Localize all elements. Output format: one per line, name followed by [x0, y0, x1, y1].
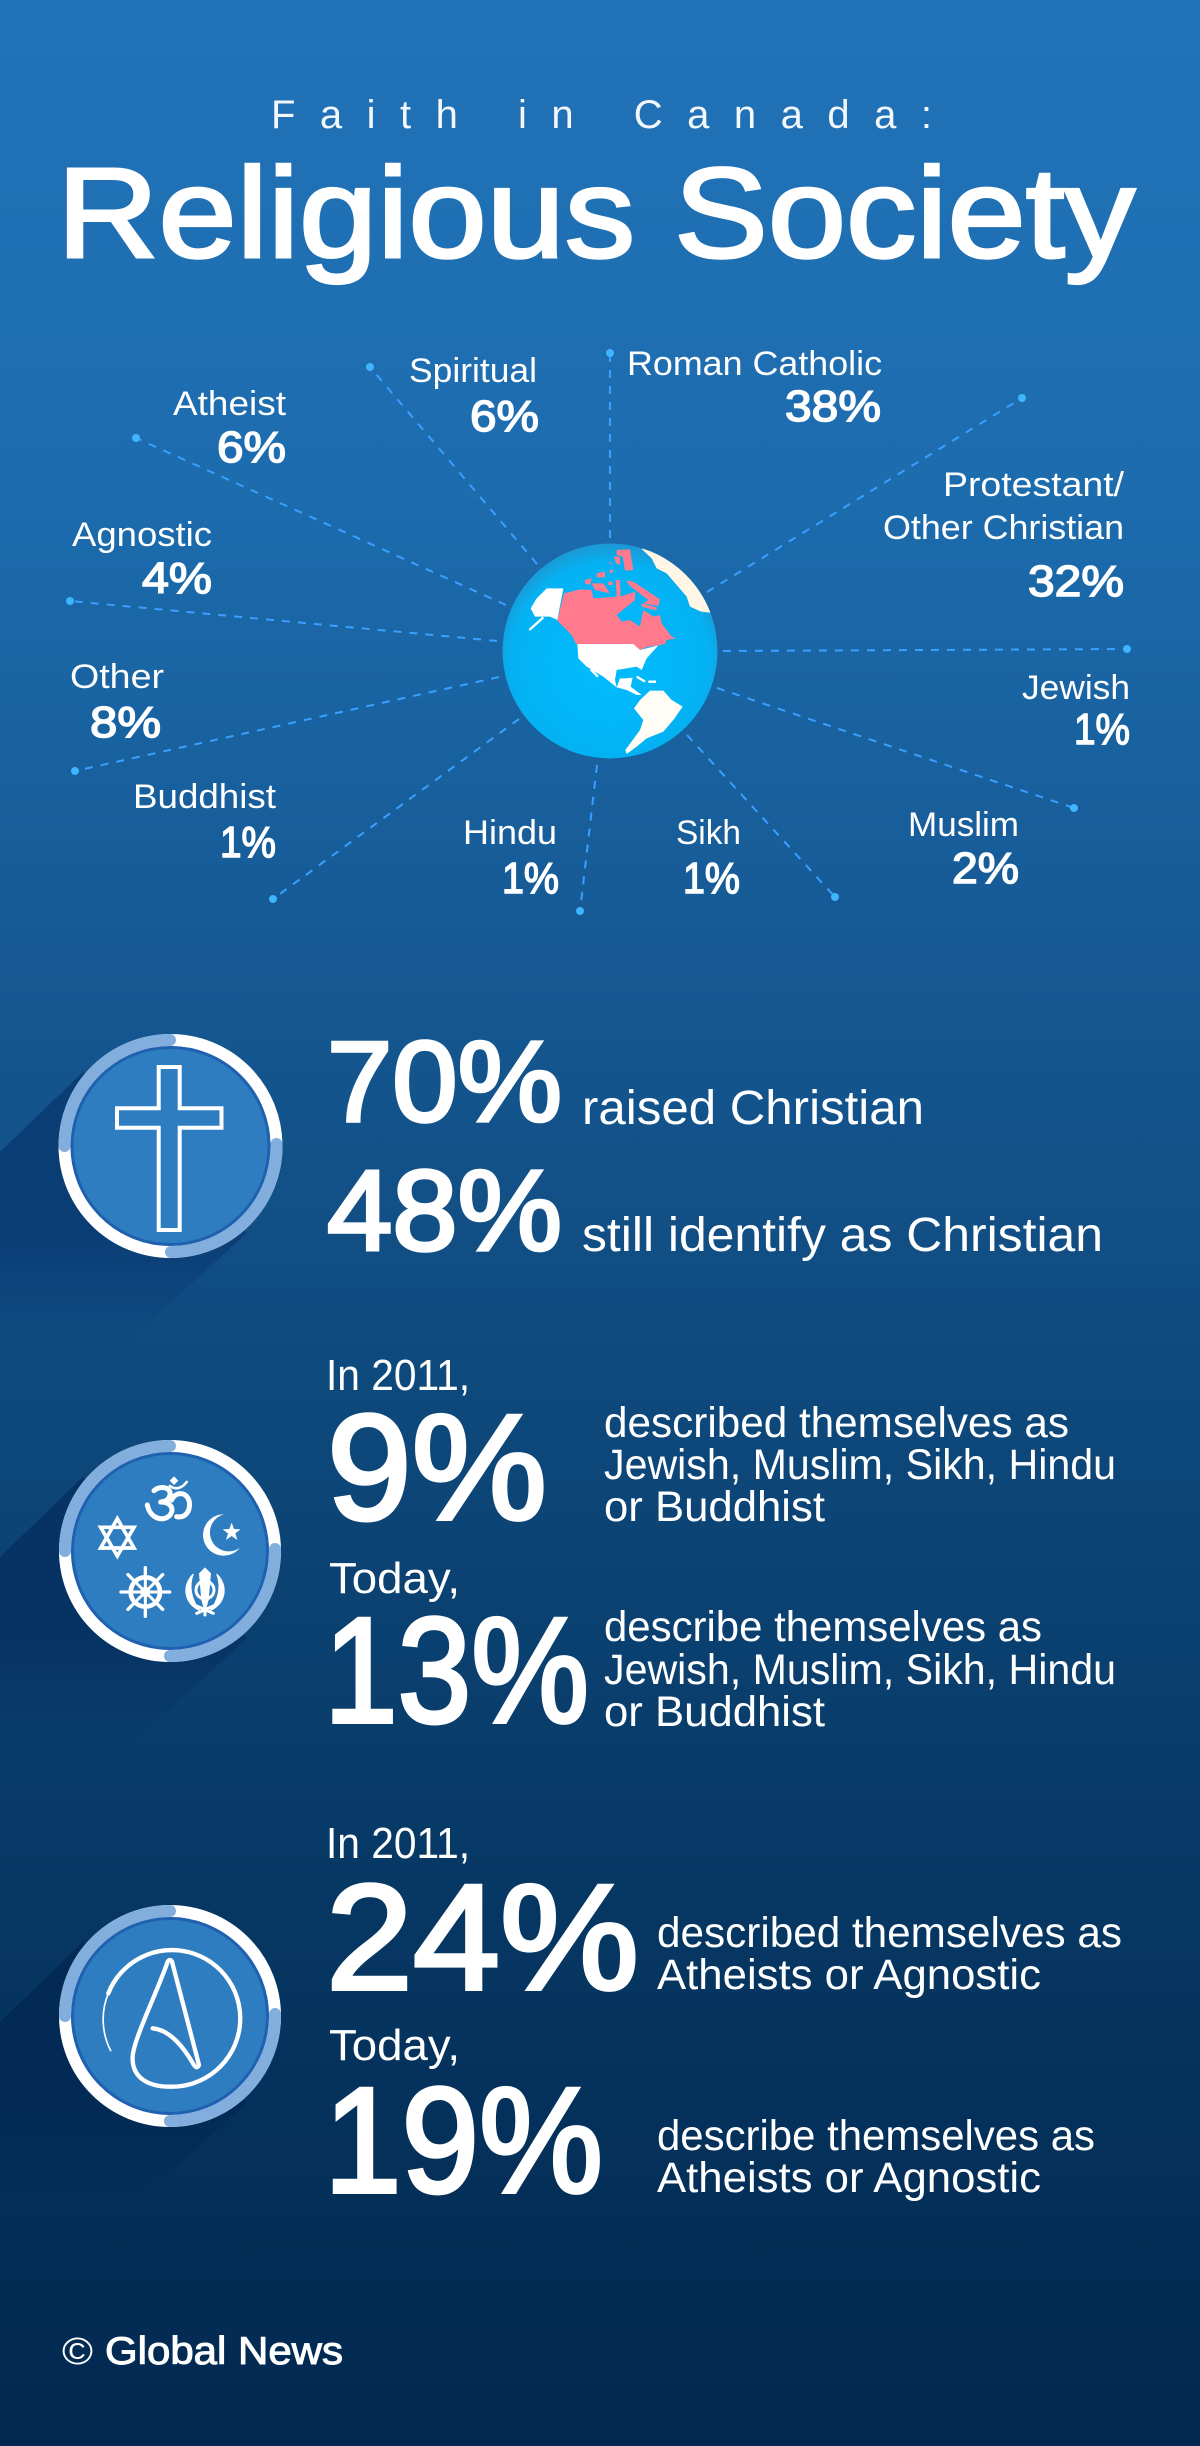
credit: Global News: ©	[62, 2331, 93, 2373]
icon: cross badge	[64, 1040, 277, 1252]
text: Today: Today,	[329, 2021, 460, 2070]
text: today description: describe themselves as	[657, 2112, 1095, 2160]
label: Roman Catholic 38%	[627, 345, 882, 431]
label: Roman Catholic 38%: Roman Catholic	[627, 345, 882, 383]
spoke: Jewish	[723, 645, 1131, 653]
text: today description: Atheists or Agnostic	[657, 2154, 1041, 2202]
label: Spiritual 6%: Spiritual	[409, 352, 537, 390]
label: Protestant/Other Christian 32%: Other Christian	[883, 509, 1124, 547]
label: Muslim 2%	[908, 806, 1019, 893]
text: today description	[604, 1603, 1116, 1736]
label: Agnostic 4%	[72, 516, 212, 603]
label: Atheist 6%: 6%	[217, 423, 286, 472]
religion breakdown radial chart	[66, 345, 1131, 915]
label: Atheist 6%: Atheist	[173, 385, 287, 423]
label: Protestant/Other Christian 32%: Protestant/	[943, 466, 1125, 504]
stat: 48% still identify as Christian: still identify as Christian	[582, 1209, 1103, 1262]
text: 2011 description: or Buddhist	[604, 1483, 825, 1531]
label: Sikh 1%	[676, 814, 741, 903]
text: Today: Today,	[329, 1554, 460, 1603]
label: Muslim 2%: Muslim	[908, 806, 1019, 844]
icon: atheism badge	[65, 1911, 275, 2121]
text: today description: or Buddhist	[604, 1688, 825, 1736]
label: Buddhist 1%	[133, 778, 277, 867]
stat: 19%: 19%	[324, 2056, 603, 2224]
stat: 13%: 13%	[324, 1586, 589, 1754]
label: Muslim 2%: 2%	[952, 844, 1019, 893]
text: In 2011: In 2011,	[326, 1351, 470, 1400]
panel: atheist and agnostic statistics	[0, 1819, 1122, 2224]
label: Agnostic 4%: Agnostic	[72, 516, 212, 554]
label: Protestant/Other Christian 32%: 32%	[1028, 557, 1124, 606]
icon: faith symbols badge	[65, 1446, 275, 1656]
label: Protestant/Other Christian 32%	[883, 466, 1125, 606]
text: 2011 description: described themselves as	[604, 1399, 1069, 1447]
label: Spiritual 6%: 6%	[470, 392, 539, 441]
spoke: Agnostic	[66, 597, 497, 641]
stat: 24%: 24%	[326, 1853, 639, 2021]
label: Other 8%: Other	[70, 658, 164, 696]
text: 2011 description	[604, 1399, 1116, 1531]
label: Roman Catholic 38%: 38%	[785, 382, 881, 431]
stat: 48% still identify as Christian: 48%	[327, 1148, 562, 1275]
stat: 48% still identify as Christian	[327, 1148, 1103, 1275]
stat: 70% raised Christian: raised Christian	[582, 1082, 924, 1135]
spoke: Atheist	[132, 434, 506, 605]
text: today description	[657, 2112, 1095, 2202]
stat: 70% raised Christian: 70%	[327, 1019, 562, 1146]
label: Other 8%: 8%	[90, 698, 161, 747]
title	[57, 93, 1135, 285]
panel: non-Christian faith statistics	[0, 1351, 1116, 1754]
spoke: Spiritual	[366, 363, 537, 564]
long shadow: atheism badge	[0, 1942, 247, 2210]
label: Sikh 1%: 1%	[683, 854, 740, 903]
label: Other 8%	[70, 658, 164, 747]
text: today description: describe themselves as	[604, 1603, 1042, 1651]
spoke: Sikh	[687, 735, 839, 901]
text: today description: Jewish, Muslim, Sikh, Hindu	[604, 1646, 1116, 1694]
spoke: Muslim	[717, 688, 1078, 812]
label: Jewish 1%: 1%	[1074, 705, 1130, 754]
text: 2011 description: Jewish, Muslim, Sikh, Hindu	[604, 1441, 1116, 1489]
spoke: Buddhist	[269, 719, 519, 903]
icon: dharma wheel	[121, 1568, 170, 1616]
headline: Religious Society: Religious Society	[57, 142, 1135, 285]
label: Sikh 1%: Sikh	[676, 814, 741, 852]
long shadow: cross badge	[0, 1072, 247, 1340]
label: Hindu 1%: 1%	[502, 854, 559, 903]
icon: khanda	[186, 1567, 224, 1615]
panel: Christian statistics	[0, 1019, 1103, 1340]
stat: 70% raised Christian	[327, 1019, 924, 1146]
text: 2011 description	[657, 1909, 1122, 1999]
label: Hindu 1%: Hindu	[463, 814, 557, 852]
text: In 2011: In 2011,	[326, 1819, 470, 1868]
spoke: Hindu	[576, 765, 597, 915]
label: Jewish 1%	[1022, 669, 1130, 754]
text: 2011 description: described themselves as	[657, 1909, 1122, 1957]
label: Agnostic 4%: 4%	[142, 554, 212, 603]
icon: globe with Canada highlighted	[502, 540, 718, 758]
text: 2011 description: Atheists or Agnostic	[657, 1951, 1041, 1999]
icon: crescent and star	[203, 1514, 241, 1556]
spoke: Other	[71, 677, 499, 775]
label: Buddhist 1%: Buddhist	[133, 778, 277, 816]
label: Buddhist 1%: 1%	[220, 818, 276, 867]
label: Jewish 1%: Jewish	[1022, 669, 1130, 707]
spoke: Protestant	[707, 394, 1026, 592]
label: Spiritual 6%	[409, 352, 539, 441]
long shadow: faiths badge	[0, 1477, 247, 1745]
label: Hindu 1%	[463, 814, 559, 903]
icon: star of David	[101, 1519, 134, 1556]
stat: 9%: 9%	[327, 1383, 547, 1551]
icon: om	[147, 1476, 190, 1519]
spoke: Roman Catholic	[606, 349, 614, 538]
kicker: Faith in Canada: Faith in Canada:	[271, 93, 932, 137]
credit: Global News: Global News	[105, 2330, 343, 2373]
label: Atheist 6%	[173, 385, 287, 472]
